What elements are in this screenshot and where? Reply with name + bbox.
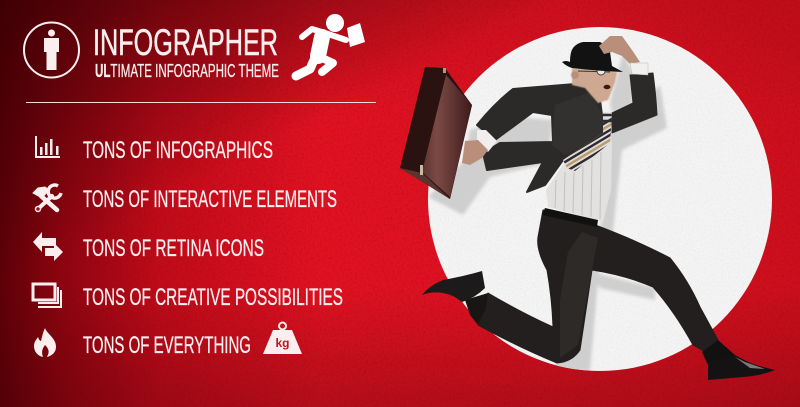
header logo: [24, 14, 365, 81]
icon: kg weight: [263, 322, 302, 354]
briefcase: [400, 67, 472, 199]
item: infographics: [35, 136, 273, 164]
icon: bar chart: [35, 136, 60, 158]
left cuff and hand: [462, 130, 497, 165]
raised cuff: [630, 63, 648, 75]
item: retina icons: [33, 232, 264, 262]
legs and trousers: [465, 210, 735, 365]
label: TONS OF EVERYTHING: [83, 332, 251, 359]
businessman: [400, 36, 775, 380]
back shoe: [422, 271, 485, 302]
glasses and mouth: [578, 67, 610, 89]
divider: [26, 102, 376, 103]
tie: [563, 112, 612, 171]
white circle: [428, 27, 772, 371]
label: TONS OF CREATIVE POSSIBILITIES: [83, 284, 343, 311]
item: creative possibilities: [33, 284, 343, 311]
subtitle: ULTIMATE INFOGRAPHIC THEME: [95, 61, 279, 81]
front shoe: [708, 355, 775, 380]
label: TONS OF INTERACTIVE ELEMENTS: [83, 186, 337, 213]
icon: hammer and wrench: [33, 185, 61, 212]
belt: [542, 208, 598, 227]
item: interactive elements: [33, 185, 337, 213]
label: TONS OF RETINA ICONS: [83, 235, 264, 262]
icon: kg weight: kg: [275, 336, 290, 350]
item: everything: [34, 322, 302, 359]
icon: swap arrows: [33, 232, 63, 261]
icon: person in circle: [24, 22, 79, 78]
icon: stacked screens: [33, 284, 61, 307]
feature list: [33, 136, 343, 359]
hat: [562, 42, 623, 72]
label: TONS OF INFOGRAPHICS: [83, 137, 273, 164]
title: INFOGRAPHER: [93, 22, 278, 63]
figure shadow: [428, 53, 667, 371]
icon: running man with briefcase: [296, 14, 365, 76]
shirt: [546, 135, 612, 222]
raised hand: [599, 36, 640, 64]
icon: flame: [34, 328, 56, 357]
jacket: [477, 73, 657, 192]
face: [571, 68, 617, 103]
